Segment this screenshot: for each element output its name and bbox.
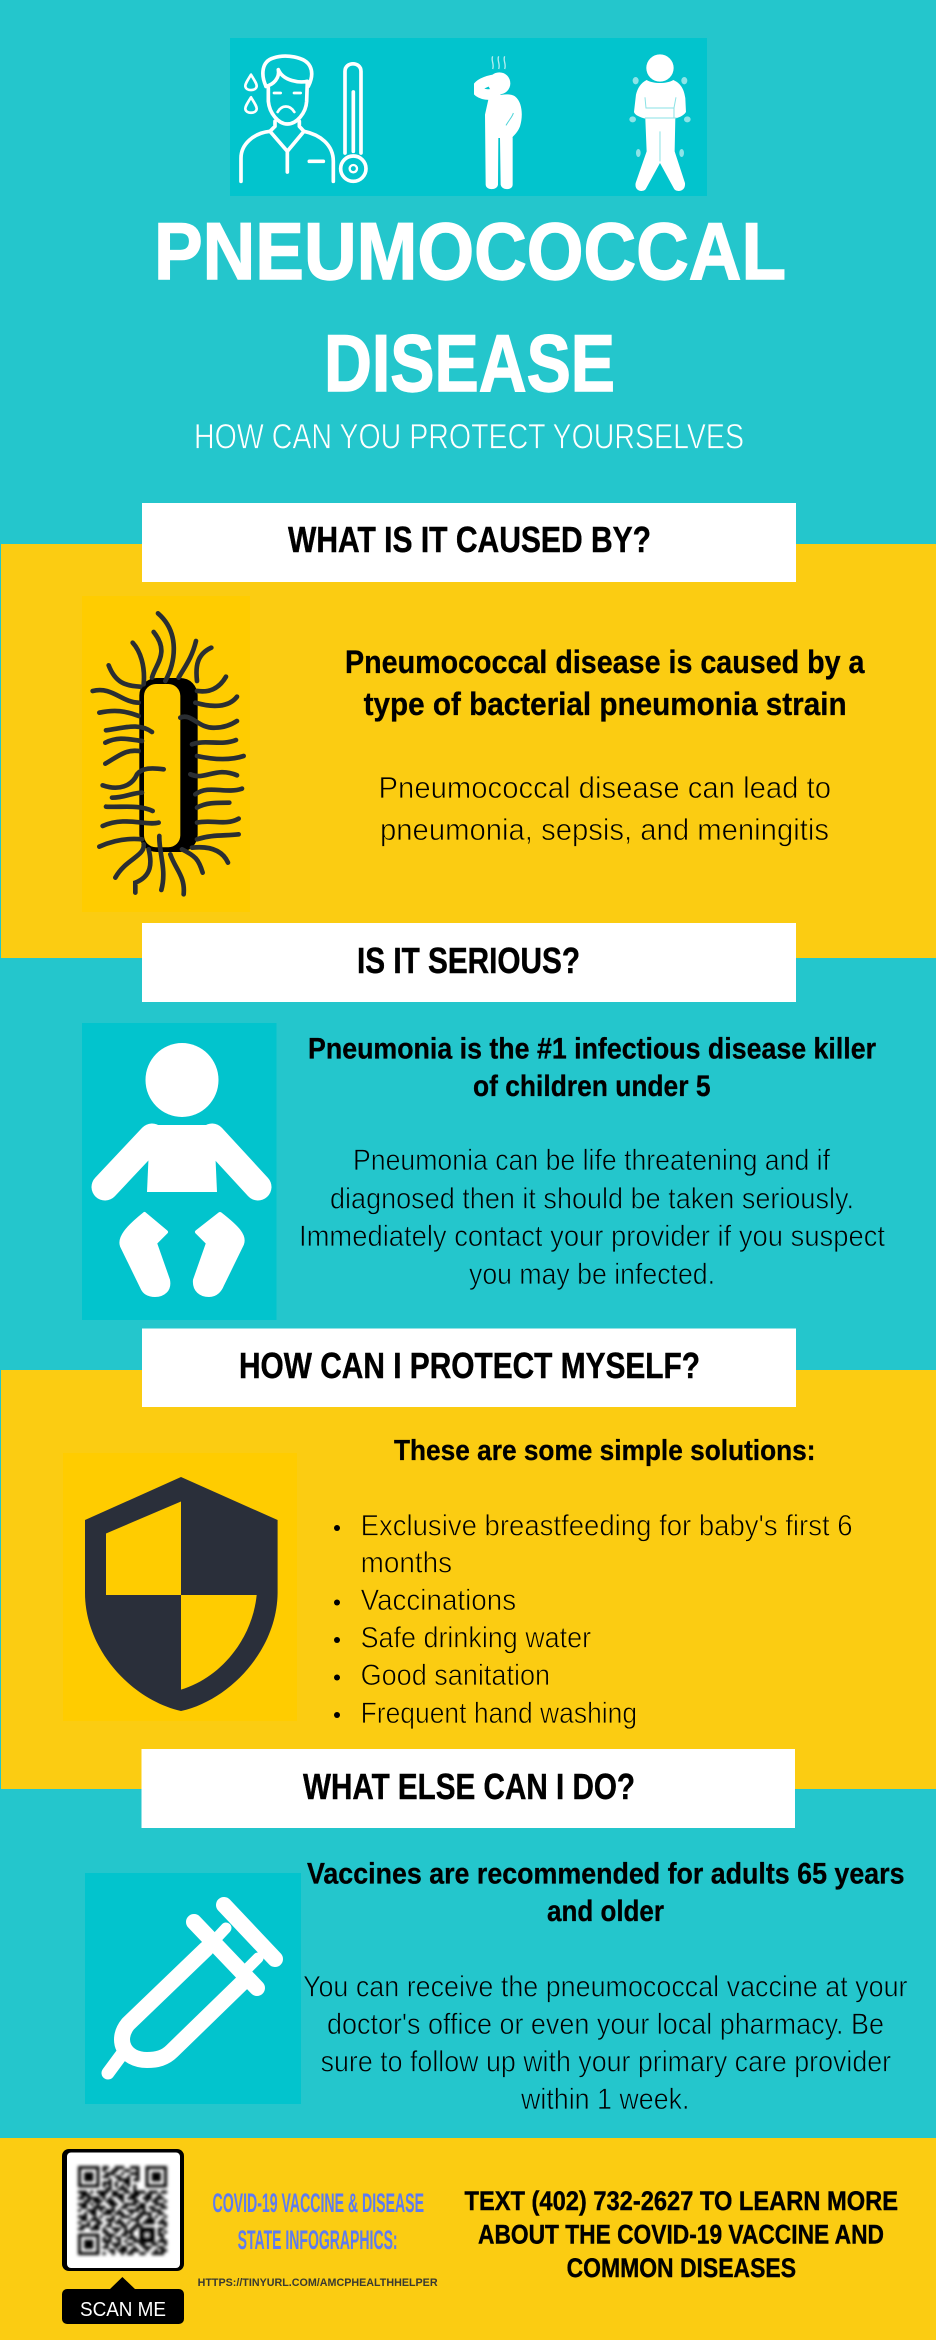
icon: person holding head [477,56,522,189]
text: vaccine advice: and older [547,1895,664,1928]
list: solutions: Good sanitation [361,1659,550,1692]
icon: bacterium [82,596,250,912]
heading: WHAT IS IT CAUSED BY? [288,519,651,560]
text: cause: Pneumococcal disease is caused by a [345,644,865,680]
link label: HTTPS://TINYURL.COM/AMCPHEALTHHELPER [198,2277,438,2289]
QR code with scan me tag: SCAN ME [80,2298,166,2321]
panel: footer [0,2138,936,2340]
panel: how can I protect myself [1,1328,936,1789]
link label: COVID-19 VACCINE & DISEASE [212,2188,424,2218]
text: vaccine advice: within 1 week. [520,2083,690,2116]
call to action [464,2186,898,2283]
icon panel: symptoms [230,38,707,196]
panel: title header [154,38,786,456]
panel: what else can I do [1,1749,936,2138]
text: cause: pneumonia, sepsis, and meningitis [380,812,829,847]
icon: person shivering [629,54,691,191]
icon: sick man with thermometer [241,56,366,181]
text: seriousness: you may be infected. [469,1258,715,1291]
link label: STATE INFOGRAPHICS: [238,2225,398,2255]
call to action: COMMON DISEASES [567,2253,796,2283]
icon: syringe [85,1873,301,2104]
heading: IS IT SERIOUS? [357,940,580,981]
list: solutions: Vaccinations [361,1584,516,1617]
text: seriousness: of children under 5 [473,1070,710,1103]
panel: is it serious [1,923,936,1370]
heading [142,1749,795,1828]
list: solutions [334,1510,853,1730]
icon: baby [82,1023,276,1320]
title: DISEASE [324,319,615,409]
text: vaccine advice [303,1858,908,2116]
icon: shield [63,1453,297,1721]
link label [198,2188,438,2289]
heading [142,503,796,582]
text: seriousness: Pneumonia can be life threatening and if [353,1144,831,1177]
subtitle: HOW CAN YOU PROTECT YOURSELVES [194,418,744,456]
text: cause: Pneumococcal disease can lead to [378,770,831,805]
text: vaccine advice: doctor's office or even your local pharmacy. Be [327,2008,884,2041]
QR code with scan me tag [62,2149,184,2324]
text: seriousness: Pneumonia is the #1 infectious disease killer [308,1032,876,1066]
title [154,207,786,409]
list: solutions: Frequent hand washing [361,1697,637,1730]
list: solutions: months [361,1546,452,1580]
heading [142,923,796,1002]
text: seriousness: diagnosed then it should be taken seriously. [330,1182,854,1216]
panel: what is it caused by [1,503,936,958]
text: seriousness: Immediately contact your provider if you suspect [299,1220,886,1253]
list: solutions: Safe drinking water [361,1622,591,1654]
title: PNEUMOCOCCAL [154,207,786,297]
heading: WHAT ELSE CAN I DO? [303,1766,635,1807]
list: solutions: Exclusive breastfeeding for baby's first 6 [361,1510,853,1542]
text: cause [345,644,865,847]
text: cause: type of bacterial pneumonia strain [364,686,847,722]
text: solutions intro: These are some simple solutions: [394,1435,816,1467]
text: seriousness [299,1032,886,1291]
heading [142,1328,796,1407]
heading: HOW CAN I PROTECT MYSELF? [239,1345,700,1386]
